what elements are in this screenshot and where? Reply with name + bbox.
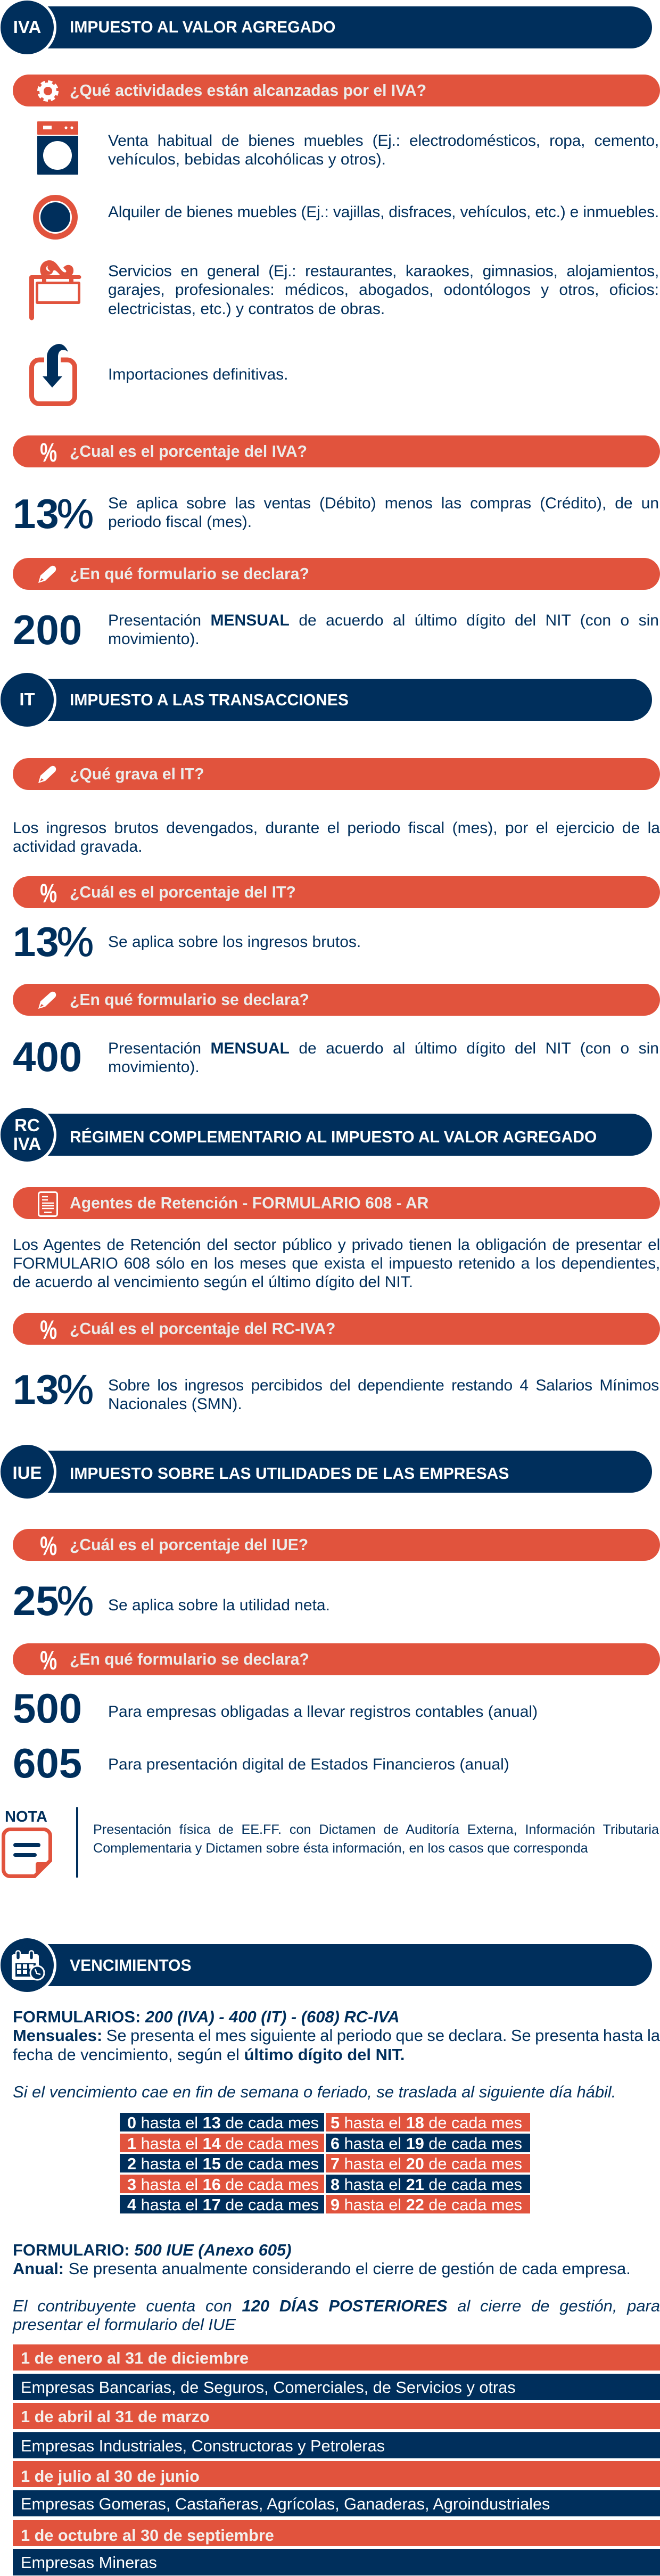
header: IUE: IUE bbox=[12, 1463, 42, 1483]
text: annual form: FORMULARIO: 500 IUE (Anexo 605) bbox=[13, 2241, 292, 2259]
text: gross income: Los ingresos brutos devengados, durante el periodo fiscal (mes), por el ejercicio de la bbox=[13, 819, 660, 837]
text: RC-IVA rate: Nacionales (SMN). bbox=[108, 1395, 242, 1413]
icon: percent: % bbox=[40, 1531, 57, 1561]
number: 605: 605 bbox=[13, 1740, 82, 1787]
table: fiscal year closings: 1 de julio al 30 de junio bbox=[21, 2467, 200, 2486]
heading: IT percentage bbox=[13, 876, 660, 908]
heading: IUE percentage: ¿Cuál es el porcentaje del IUE? bbox=[70, 1536, 308, 1554]
table: NIT last digit deadlines: 9 hasta el 22 de cada mes bbox=[331, 2195, 522, 2214]
text: annual form: Anual: Se presenta anualmente considerando el cierre de gestión de cada empresa. bbox=[13, 2259, 631, 2278]
text: form 400 bbox=[108, 1039, 659, 1076]
header: RC-IVA: IVA bbox=[13, 1134, 41, 1154]
text: monthly forms: Mensuales: Se presenta el mes siguiente al periodo que se declara. Se presenta hasta la bbox=[13, 2026, 660, 2045]
text: monthly forms: fecha de vencimiento, según el último dígito del NIT. bbox=[13, 2045, 405, 2064]
header: IUE bbox=[1, 1445, 652, 1499]
heading: IUE form: ¿En qué formulario se declara? bbox=[70, 1651, 309, 1668]
text: 120 days rule: El contribuyente cuenta con 120 DÍAS POSTERIORES al cierre de gestión, para bbox=[13, 2297, 660, 2315]
table: NIT last digit deadlines: 8 hasta el 21 de cada mes bbox=[331, 2175, 522, 2193]
icon: percent: % bbox=[40, 878, 57, 908]
text: IT rate: Se aplica sobre los ingresos brutos. bbox=[108, 933, 361, 951]
number: 13%: 13% bbox=[13, 1366, 94, 1413]
table: fiscal year closings bbox=[0, 2344, 660, 2575]
icon: pencil bbox=[38, 766, 56, 783]
text: monthly forms: FORMULARIOS: 200 (IVA) - 400 (IT) - (608) RC-IVA bbox=[13, 2007, 400, 2026]
heading: IVA form bbox=[13, 558, 660, 590]
text: gross income bbox=[13, 819, 660, 855]
panel: deadlines section bbox=[1, 1938, 660, 2575]
number: 500: 500 bbox=[13, 1685, 82, 1732]
text: withholding agents description: FORMULARIO 608 sólo en los meses que exista el impuesto retenido a los dependientes, bbox=[13, 1255, 660, 1272]
table: NIT last digit deadlines: 5 hasta el 18 de cada mes bbox=[331, 2113, 522, 2132]
text: gross income: actividad gravada. bbox=[13, 838, 143, 855]
heading: IVA percentage: ¿Cual es el porcentaje del IVA? bbox=[70, 443, 307, 460]
text: monthly forms bbox=[13, 2007, 660, 2064]
table: fiscal year closings: Empresas Industriales, Constructoras y Petroleras bbox=[21, 2437, 385, 2455]
panel: IUE section bbox=[1, 1445, 660, 1878]
table: fiscal year closings: Empresas Mineras bbox=[21, 2553, 157, 2572]
text: RC-IVA rate bbox=[108, 1377, 659, 1413]
text: note bbox=[93, 1822, 659, 1856]
icon: percent: % bbox=[40, 1645, 57, 1675]
heading: withholding agents: Agentes de Retención - FORMULARIO 608 - AR bbox=[70, 1195, 428, 1212]
header: RC-IVA: RÉGIMEN COMPLEMENTARIO AL IMPUESTO AL VALOR AGREGADO bbox=[70, 1129, 597, 1146]
label: NOTA: NOTA bbox=[5, 1808, 47, 1825]
heading: RC-IVA percentage: ¿Cuál es el porcentaje del RC-IVA? bbox=[70, 1320, 335, 1338]
text: withholding agents description: Los Agentes de Retención del sector público y privado tienen la obligación de presentar el bbox=[13, 1236, 660, 1253]
icon: washing machine bbox=[37, 121, 78, 175]
number: 13%: 13% bbox=[13, 490, 94, 537]
text: services: electricistas, etc.) y contratos de obras. bbox=[108, 300, 385, 318]
heading: IUE form bbox=[13, 1643, 660, 1675]
text: form 400: Presentación MENSUAL de acuerdo al último dígito del NIT (con o sin bbox=[108, 1039, 659, 1057]
text: imports: Importaciones definitivas. bbox=[108, 366, 288, 383]
heading: IT percentage: ¿Cuál es el porcentaje del IT? bbox=[70, 884, 296, 901]
text: IVA rate bbox=[108, 495, 659, 531]
icon: import box bbox=[29, 344, 77, 406]
heading: activities bbox=[13, 75, 660, 106]
icon: pencil bbox=[38, 991, 56, 1009]
text: form 400: movimiento). bbox=[108, 1058, 200, 1076]
text: RC-IVA rate: Sobre los ingresos percibidos del dependiente restando 4 Salarios Mínimos bbox=[108, 1377, 659, 1394]
text: form 200: movimiento). bbox=[108, 630, 200, 648]
heading: what IT taxes: ¿Qué grava el IT? bbox=[70, 766, 204, 783]
heading: withholding agents bbox=[13, 1187, 660, 1219]
header: RC-IVA bbox=[1, 1108, 652, 1162]
text: IVA rate: Se aplica sobre las ventas (Débito) menos las compras (Crédito), de un bbox=[108, 495, 659, 512]
callout: note bbox=[2, 1807, 659, 1878]
text: 120 days rule bbox=[13, 2297, 660, 2334]
text: form 200: Presentación MENSUAL de acuerdo al último dígito del NIT (con o sin bbox=[108, 612, 659, 629]
text: 120 days rule: presentar el formulario del IUE bbox=[13, 2315, 236, 2334]
text: form 500: Para empresas obligadas a llevar registros contables (anual) bbox=[108, 1703, 538, 1721]
icon: sticky note bbox=[2, 1828, 52, 1878]
text: goods sale: Venta habitual de bienes muebles (Ej.: electrodomésticos, ropa, cemento, bbox=[108, 132, 659, 150]
text: note: Complementaria y Dictamen sobre ésta información, en los casos que corresponda bbox=[93, 1841, 588, 1856]
icon: calendar bbox=[12, 1950, 45, 1981]
icon: document bbox=[38, 1191, 58, 1217]
heading: IT form: ¿En qué formulario se declara? bbox=[70, 991, 309, 1009]
header: IT: IT bbox=[19, 689, 35, 709]
table: fiscal year closings: Empresas Bancarias, de Seguros, Comerciales, de Servicios y otras bbox=[21, 2378, 516, 2397]
header: IT: IMPUESTO A LAS TRANSACCIONES bbox=[70, 692, 349, 709]
text: IUE rate: Se aplica sobre la utilidad neta. bbox=[108, 1596, 330, 1614]
heading: IUE percentage bbox=[13, 1529, 660, 1561]
text: form 605: Para presentación digital de Estados Financieros (anual) bbox=[108, 1756, 509, 1773]
text: form 200 bbox=[108, 612, 659, 648]
table: NIT last digit deadlines: 3 hasta el 16 de cada mes bbox=[127, 2175, 319, 2193]
header: deadlines bbox=[1, 1938, 652, 1992]
header: IT bbox=[1, 673, 652, 727]
table: fiscal year closings: 1 de abril al 31 de marzo bbox=[21, 2407, 210, 2426]
icon: percent: % bbox=[40, 1315, 57, 1345]
text: withholding agents description bbox=[13, 1236, 660, 1291]
text: IVA rate: periodo fiscal (mes). bbox=[108, 513, 252, 531]
heading: IVA form: ¿En qué formulario se declara? bbox=[70, 565, 309, 583]
number: 400: 400 bbox=[13, 1033, 82, 1080]
header: deadlines: VENCIMIENTOS bbox=[70, 1957, 192, 1974]
header: IVA: IVA bbox=[13, 17, 41, 37]
header: IVA bbox=[1, 1, 652, 54]
panel: IT section bbox=[1, 673, 660, 1080]
text: services: garajes, profesionales: médicos, abogados, odontólogos y otros, oficios: bbox=[108, 281, 659, 299]
text: note: Presentación física de EE.FF. con Dictamen de Auditoría Externa, Información Tributaria bbox=[93, 1822, 659, 1837]
table: NIT last digit deadlines: 1 hasta el 14 de cada mes bbox=[127, 2134, 319, 2153]
table: NIT last digit deadlines: 7 hasta el 20 de cada mes bbox=[331, 2154, 522, 2173]
text: holiday rule: Si el vencimiento cae en fin de semana o feriado, se traslada al siguiente día hábil. bbox=[13, 2083, 616, 2101]
number: 25%: 25% bbox=[13, 1577, 94, 1624]
icon: percent: % bbox=[40, 438, 57, 467]
icon: pencil bbox=[38, 565, 56, 583]
number: 200: 200 bbox=[13, 606, 82, 653]
text: services bbox=[108, 262, 659, 318]
text: goods sale: vehículos, bebidas alcohólicas y otros). bbox=[108, 151, 386, 168]
table: fiscal year closings: Empresas Gomeras, Castañeras, Agrícolas, Ganaderas, Agroindustriales bbox=[21, 2495, 550, 2513]
text: services: Servicios en general (Ej.: restaurantes, karaokes, gimnasios, alojamientos, bbox=[108, 262, 659, 280]
icon: plate bbox=[33, 195, 78, 240]
text: goods sale bbox=[108, 132, 659, 168]
header: IVA: IMPUESTO AL VALOR AGREGADO bbox=[70, 19, 335, 36]
heading: IT form bbox=[13, 984, 660, 1016]
table: NIT last digit deadlines: 4 hasta el 17 de cada mes bbox=[127, 2195, 319, 2214]
table: NIT last digit deadlines: 6 hasta el 19 de cada mes bbox=[331, 2134, 522, 2153]
number: 13%: 13% bbox=[13, 918, 94, 965]
panel: RC-IVA section bbox=[1, 1108, 660, 1413]
text: withholding agents description: de acuerdo al vencimiento según el último dígito del NIT. bbox=[13, 1273, 413, 1291]
heading: IVA percentage bbox=[13, 435, 660, 467]
heading: activities: ¿Qué actividades están alcanzadas por el IVA? bbox=[70, 82, 426, 100]
header: RC-IVA: RC bbox=[14, 1115, 40, 1135]
icon: gear bbox=[37, 80, 59, 102]
text: annual form bbox=[13, 2241, 660, 2278]
table: NIT last digit deadlines bbox=[120, 2113, 530, 2213]
panel: IVA section bbox=[1, 1, 660, 653]
header: IUE: IMPUESTO SOBRE LAS UTILIDADES DE LAS EMPRESAS bbox=[70, 1465, 509, 1483]
table: NIT last digit deadlines: 0 hasta el 13 de cada mes bbox=[127, 2113, 319, 2132]
table: NIT last digit deadlines: 2 hasta el 15 de cada mes bbox=[127, 2154, 319, 2173]
table: fiscal year closings: 1 de enero al 31 de diciembre bbox=[21, 2349, 249, 2367]
heading: what IT taxes bbox=[13, 758, 660, 790]
heading: RC-IVA percentage bbox=[13, 1313, 660, 1345]
text: rentals: Alquiler de bienes muebles (Ej.: vajillas, disfraces, vehículos, etc.) e inmuebles. bbox=[108, 203, 659, 221]
table: fiscal year closings: 1 de octubre al 30 de septiembre bbox=[21, 2526, 274, 2545]
icon: service counter bbox=[29, 260, 81, 320]
